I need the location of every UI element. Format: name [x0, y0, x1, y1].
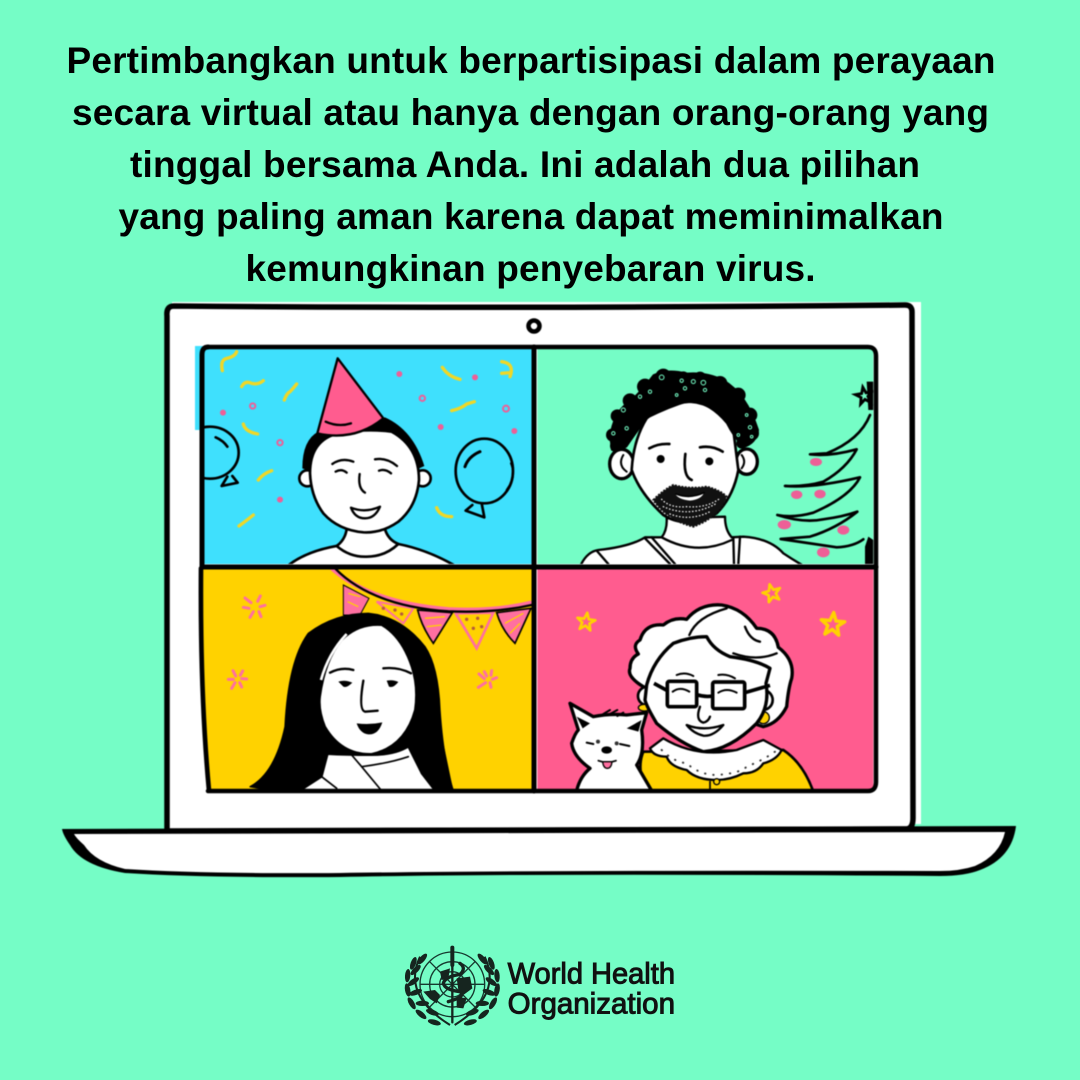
face details — [330, 668, 411, 734]
heading text: yang paling aman karena dapat meminimalkan — [118, 196, 944, 237]
heading text: Pertimbangkan untuk berpartisipasi dalam perayaan — [66, 40, 996, 81]
party hat — [317, 358, 383, 436]
screen frame and dividers — [202, 347, 876, 791]
lace collar — [650, 738, 782, 785]
hair — [629, 605, 792, 727]
continents — [423, 968, 472, 1008]
WHO wordmark: World Health — [508, 958, 675, 991]
panel: party boy — [181, 348, 532, 567]
laptop illustration — [62, 302, 1016, 877]
eyes, brows, nose — [649, 444, 723, 480]
heading text — [66, 40, 996, 289]
pink bursts — [228, 596, 497, 688]
face details — [332, 459, 397, 518]
heading text: secara virtual atau hanya dengan orang-orang yang — [72, 92, 989, 133]
ears — [610, 449, 757, 479]
laurel wreath — [404, 952, 501, 1027]
panel: bearded man — [537, 348, 874, 567]
confetti — [220, 352, 517, 526]
heading text: kemungkinan penyebaran virus. — [246, 248, 816, 289]
panel: woman with long hair — [201, 567, 532, 791]
face — [320, 625, 416, 754]
face — [632, 402, 738, 522]
panel: grandmother with dog — [537, 568, 873, 792]
bunting flags — [330, 567, 532, 648]
hair — [302, 417, 424, 473]
body — [287, 529, 457, 567]
laptop lid — [167, 302, 921, 831]
face — [310, 430, 419, 532]
earrings — [638, 704, 769, 724]
ears — [638, 687, 773, 710]
face — [645, 637, 770, 752]
globe — [420, 952, 485, 1017]
staff and serpent — [443, 948, 463, 1022]
WHO wordmark — [508, 958, 675, 1021]
dog — [570, 703, 652, 791]
WHO wordmark: Organization — [508, 988, 675, 1021]
neck and collar — [300, 747, 435, 791]
glasses — [654, 681, 770, 709]
face details — [673, 674, 737, 736]
laptop base — [62, 826, 1016, 877]
curly hair — [606, 369, 759, 452]
balloons — [181, 427, 513, 517]
WHO logo — [404, 948, 675, 1027]
ears — [299, 470, 315, 486]
long hair — [250, 613, 453, 791]
heading text: tinggal bersama Anda. Ini adalah dua pilihan — [130, 144, 920, 185]
christmas tree — [777, 382, 874, 564]
torso — [580, 517, 805, 567]
WHO emblem — [404, 948, 501, 1027]
sweater — [640, 750, 813, 792]
yellow stars — [576, 582, 845, 636]
mouth — [662, 493, 720, 517]
beard — [653, 485, 727, 527]
